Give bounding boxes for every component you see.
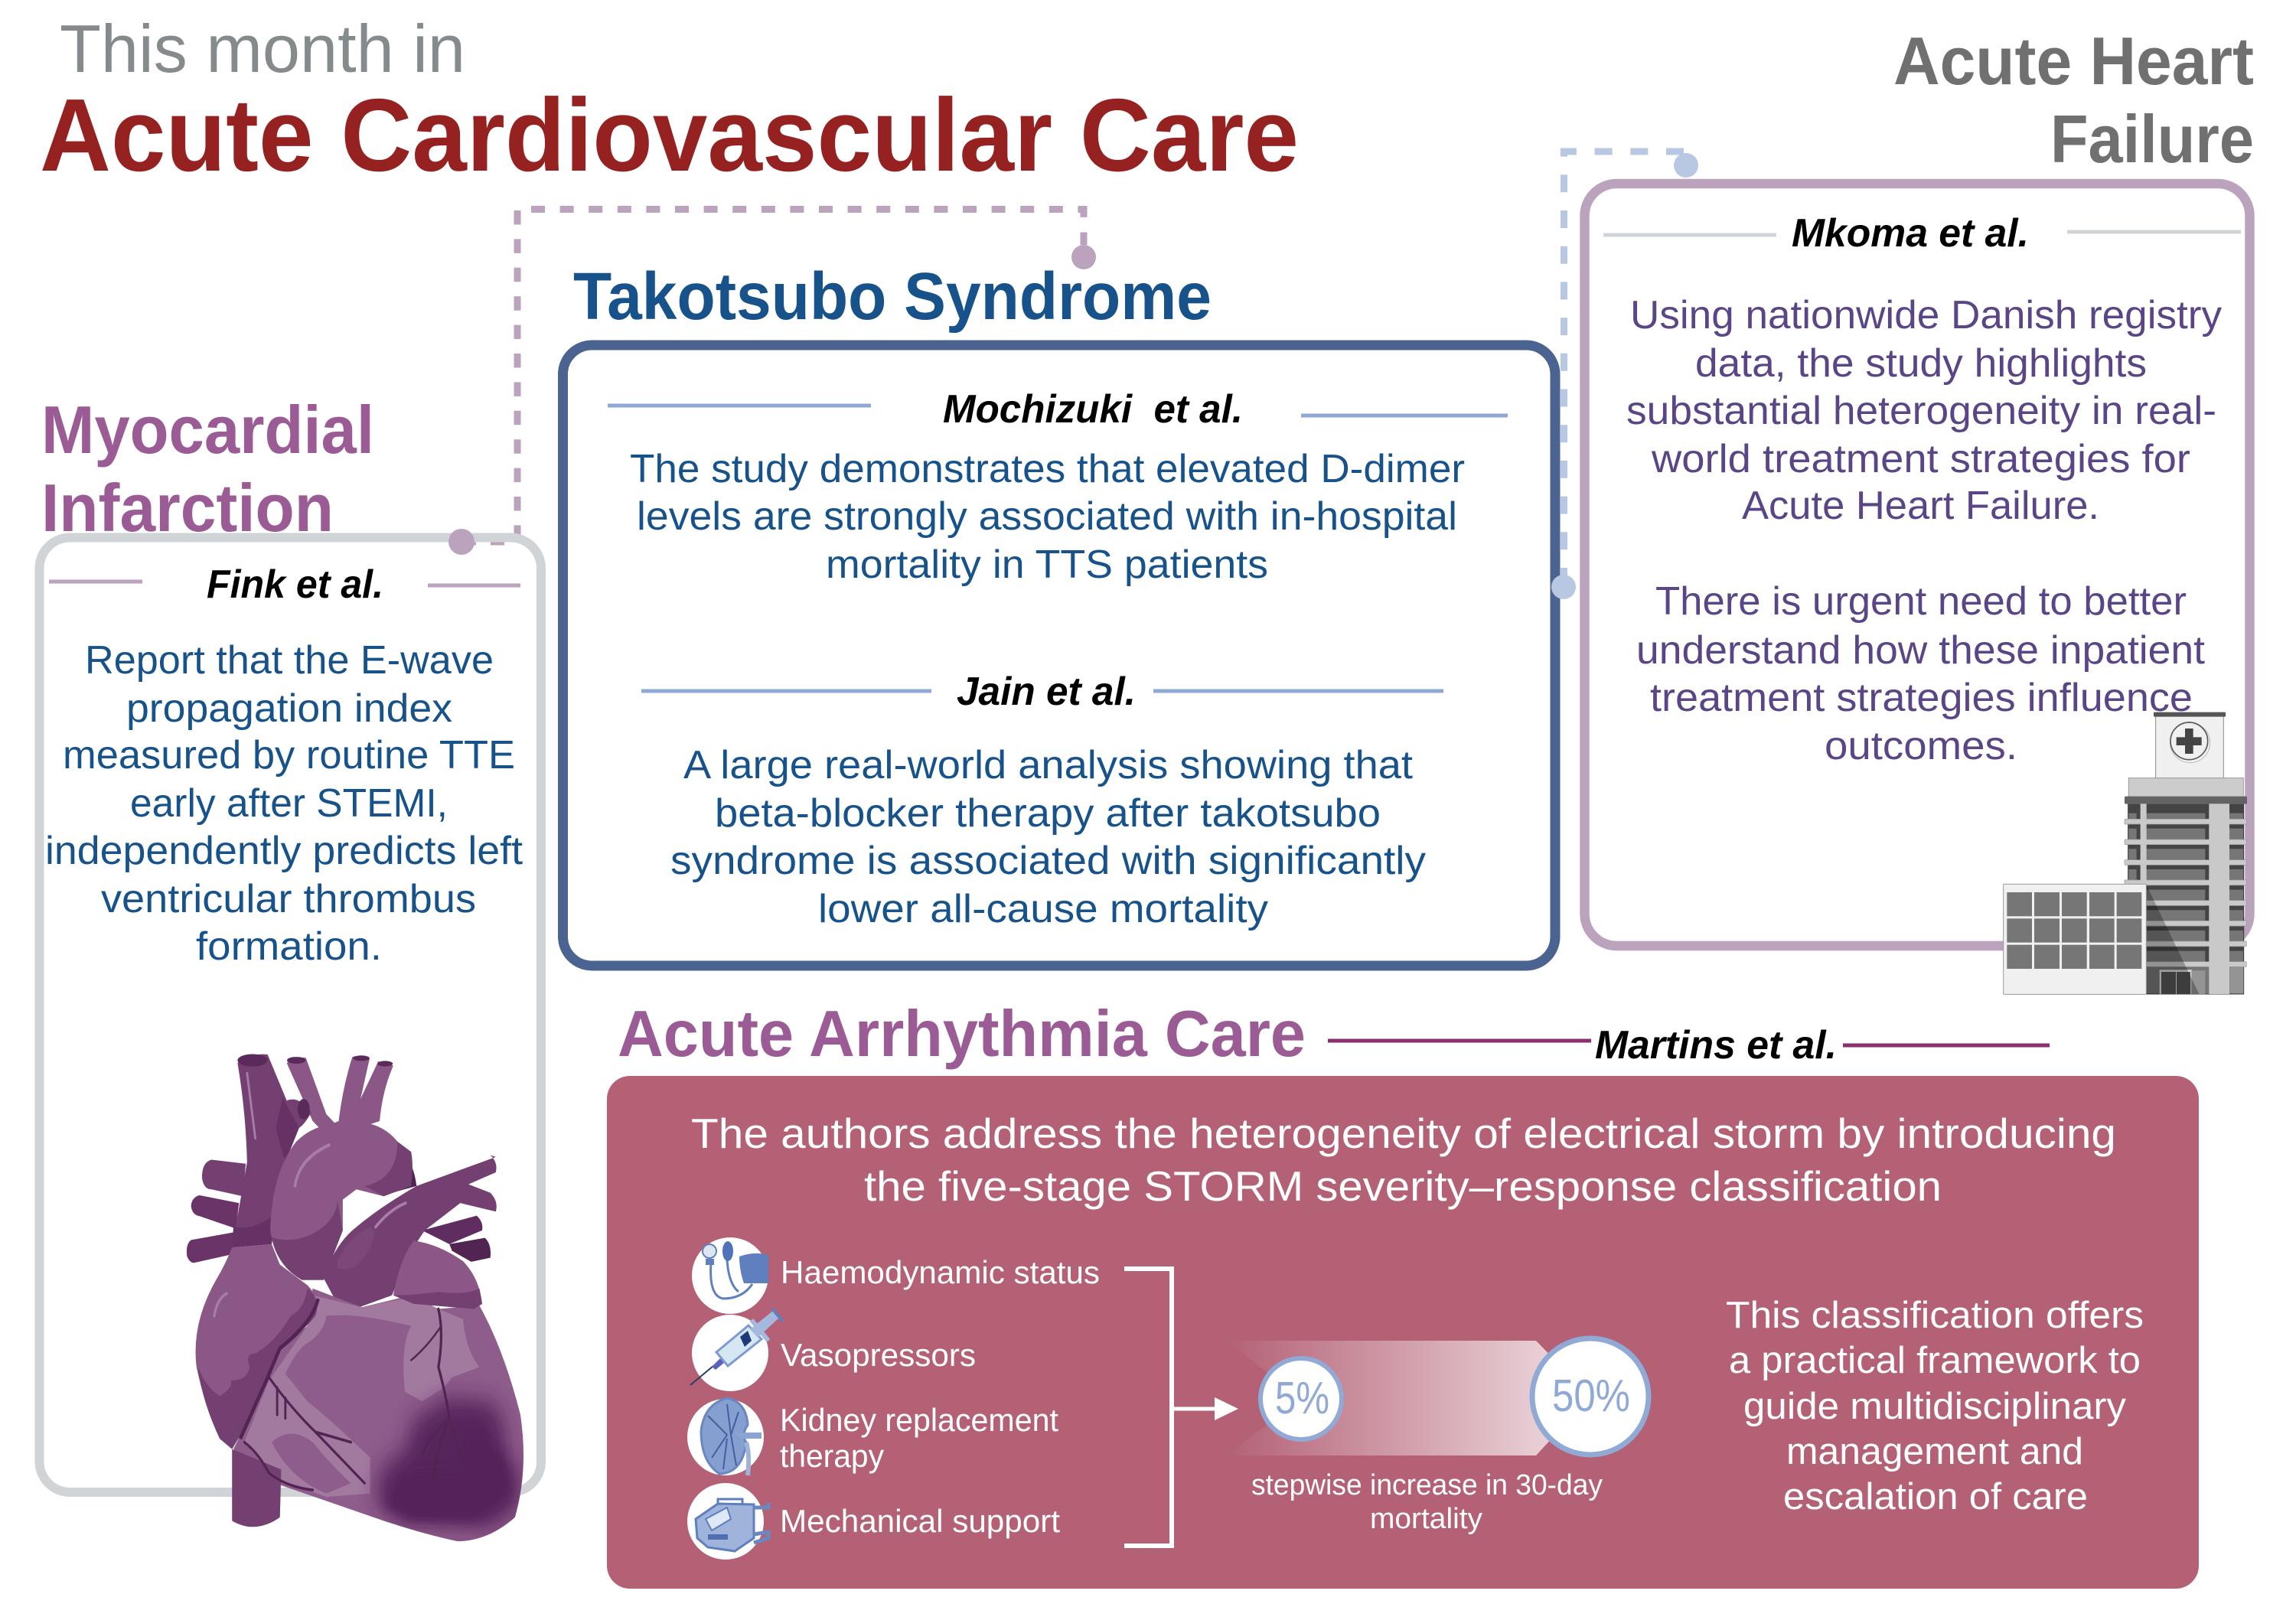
text: Mkoma summary: understand how these inpatient	[1636, 628, 2206, 673]
labels: severity factors: Mechanical support	[780, 1503, 1060, 1539]
text: classification conclusion: This classification offers	[1726, 1295, 2144, 1336]
icon: syringe	[690, 1309, 783, 1391]
author: Mochizuki et al.: Mochizuki et al.	[943, 387, 1243, 432]
text: Mochizuki summary	[630, 447, 1465, 587]
panel: acute arrhythmia care	[607, 1076, 2199, 1589]
title	[40, 11, 1299, 193]
labels: severity factors	[780, 1254, 1100, 1539]
text: Mkoma summary: outcomes.	[1825, 724, 2017, 768]
text: arrhythmia intro	[691, 1110, 2116, 1210]
heading: myocardial infarction: Myocardial	[41, 392, 374, 468]
text: Jain summary	[670, 743, 1426, 931]
text: arrhythmia intro: The authors address the heterogeneity of electrical storm by introducing	[691, 1110, 2116, 1157]
text: classification conclusion: escalation of care	[1783, 1476, 2088, 1517]
labels: severity factors: Vasopressors	[781, 1337, 976, 1373]
heading: acute heart failure: Failure	[2050, 101, 2254, 177]
text: Fink summary: early after STEMI,	[130, 781, 448, 826]
labels: severity factors: Kidney replacement	[780, 1402, 1058, 1438]
text: mortality caption: stepwise increase in 30-day	[1251, 1469, 1603, 1501]
text: Mkoma summary: There is urgent need to better	[1655, 579, 2187, 624]
text: Jain summary: syndrome is associated with significantly	[670, 839, 1426, 883]
text: Fink summary: propagation index	[126, 686, 452, 731]
title: Acute Cardiovascular Care	[40, 77, 1299, 193]
text: Fink summary: Report that the E-wave	[85, 638, 494, 683]
heading: myocardial infarction	[41, 392, 374, 546]
text: Mkoma summary	[1626, 293, 2222, 768]
text: Jain summary: lower all-cause mortality	[818, 887, 1268, 931]
panel: acute heart failure	[1584, 184, 2250, 946]
labels: severity factors: therapy	[780, 1438, 884, 1474]
bracket and arrow	[1124, 1269, 1238, 1546]
text: Fink summary: independently predicts left	[45, 829, 523, 873]
text: classification conclusion: guide multidisciplinary	[1743, 1386, 2127, 1427]
text: Mochizuki summary: levels are strongly associated with in-hospital	[637, 494, 1457, 539]
heading: takotsubo syndrome: Takotsubo Syndrome	[573, 259, 1212, 334]
icon: mechanical support device	[687, 1483, 768, 1560]
text: Fink summary: measured by routine TTE	[63, 733, 515, 777]
text: Jain summary: beta-blocker therapy after takotsubo	[715, 791, 1381, 836]
author: Fink et al.: Fink et al.	[207, 562, 383, 607]
heading: acute heart failure: Acute Heart	[1893, 23, 2254, 99]
stat: 50 percent: 50%	[1552, 1371, 1630, 1421]
stat: 50 percent	[1532, 1338, 1649, 1455]
author: Martins et al.: Martins et al.	[1595, 1023, 1837, 1068]
icon: hospital	[2004, 712, 2247, 994]
title: This month in	[60, 11, 465, 86]
heading: acute heart failure	[1893, 23, 2254, 177]
mortality gradient bar	[1227, 1338, 1649, 1455]
panel: takotsubo syndrome	[563, 345, 1555, 966]
text: Mkoma summary: Using nationwide Danish registry	[1630, 293, 2222, 337]
heading: acute arrhythmia care: Acute Arrhythmia Care	[618, 998, 1306, 1071]
text: classification conclusion	[1726, 1295, 2144, 1517]
text: Jain summary: A large real-world analysis showing that	[683, 743, 1414, 787]
connector: takotsubo to acute heart failure	[1551, 152, 1698, 599]
author: Jain et al.: Jain et al.	[957, 670, 1136, 714]
text: Mkoma summary: treatment strategies influence	[1650, 676, 2193, 720]
icon: kidney	[687, 1398, 764, 1475]
text: Mkoma summary: Acute Heart Failure.	[1742, 484, 2099, 528]
text: Fink summary: formation.	[196, 924, 382, 969]
text: Mkoma summary: data, the study highlights	[1695, 341, 2147, 386]
text: arrhythmia intro: the five-stage STORM severity–response classification	[864, 1162, 1942, 1210]
panel: myocardial infarction	[40, 529, 541, 1492]
text: Mkoma summary: substantial heterogeneity in real-	[1626, 389, 2216, 433]
text: Mkoma summary: world treatment strategies for	[1651, 437, 2190, 481]
stat: 5 percent	[1261, 1358, 1342, 1439]
text: Fink summary: ventricular thrombus	[101, 877, 476, 921]
text: classification conclusion: a practical framework to	[1729, 1340, 2141, 1381]
text: Mochizuki summary: The study demonstrates that elevated D-dimer	[630, 447, 1465, 491]
text: Mochizuki summary: mortality in TTS patients	[826, 543, 1268, 587]
heading: myocardial infarction: Infarction	[41, 470, 334, 546]
author: Mkoma et al.: Mkoma et al.	[1792, 211, 2029, 256]
text: Fink summary	[45, 638, 523, 969]
icon: blood pressure cuff	[692, 1237, 768, 1314]
text: mortality caption	[1251, 1469, 1603, 1535]
icon: heart with infarct	[187, 1054, 523, 1541]
text: classification conclusion: management and	[1786, 1431, 2083, 1472]
connector: myocardial infarction to takotsubo	[463, 210, 1096, 542]
text: mortality caption: mortality	[1370, 1503, 1482, 1535]
labels: severity factors: Haemodynamic status	[781, 1254, 1100, 1290]
stat: 5 percent: 5%	[1275, 1373, 1329, 1423]
